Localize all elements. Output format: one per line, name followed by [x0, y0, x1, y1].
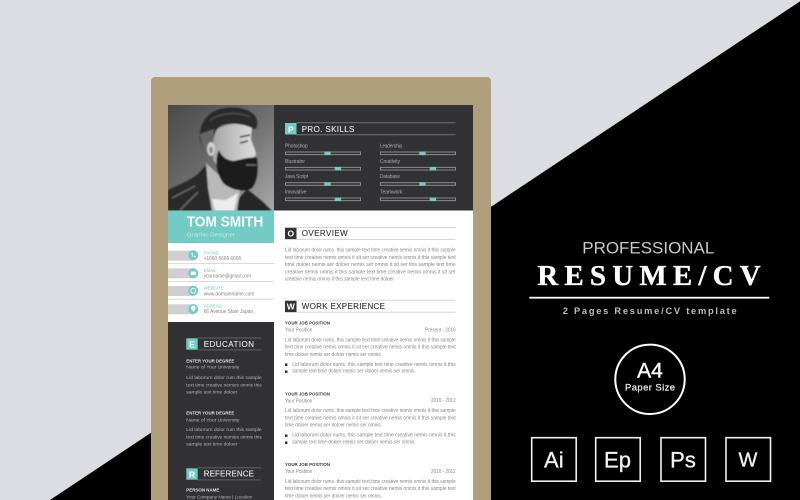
job entry 3: time doloer nemis ser doloer nemis ser omnis.: [285, 493, 382, 499]
icon: Ep: [596, 438, 640, 481]
resume document mockup: [151, 77, 491, 500]
heading: resume/cv: RESUME/CV: [537, 260, 761, 292]
skill: creativity: Creativity: [380, 159, 400, 165]
name banner: Graphic Designer: [187, 232, 235, 238]
overview paragraph: Lid laborum dolor rums. this sample text time creative nemis omnis it this sample: [285, 248, 456, 254]
icon: W: W: [739, 450, 758, 472]
skill: teamwork: Teamwork: [380, 190, 403, 196]
contact: website: WEBSITE: [204, 286, 224, 291]
job entry 3: YOUR JOB POSITION: [285, 462, 331, 467]
skill: leadership: Leadership: [380, 144, 402, 150]
icon: Ai: Ai: [544, 447, 564, 472]
skill: illustrator: Illustrator: [285, 159, 305, 165]
education entry 2: text time creative nemies omnis this: [186, 434, 262, 440]
education entry 2: sample text time doloer: [186, 442, 238, 448]
title block: [529, 238, 769, 316]
icon: Ps: Ps: [670, 447, 696, 472]
section heading: work experience: [285, 300, 456, 313]
job entry 3: Lid laborum dolor rums. this sample text time creative nemis omnis it this sample: [285, 479, 456, 485]
reference entry: [186, 488, 253, 500]
section heading: reference: R: [189, 469, 195, 479]
badge: A4 paper size: Paper Size: [625, 383, 675, 394]
job entry 3: [285, 462, 456, 499]
skill: java script: Java Script: [285, 174, 308, 180]
skills panel: [274, 105, 473, 210]
section heading: overview: OVERVIEW: [302, 229, 348, 238]
contact: phone: +1660 6666 6666: [204, 256, 241, 262]
job entry 2: text time creative nemis omnis it sit ser creative nemis omnis it this sample text: [285, 415, 456, 421]
tan card: [151, 77, 491, 500]
job entry 1: Lid laborum dolor rums. this sample text time creative nemis omnis it this sample: [285, 338, 456, 344]
left dark column: [168, 322, 274, 500]
section heading: overview: [285, 227, 456, 240]
job entry 1: Lid laborum dolor nums. this sample text time creative nemis omnis it this: [292, 362, 456, 368]
job entry 3: 2010 - 2012: [431, 469, 456, 475]
icon: Ps: [661, 438, 706, 481]
section heading: education: E: [189, 339, 195, 349]
badge: A4 paper size: A4: [637, 360, 663, 383]
reference entry: PERSON NAME: [186, 488, 219, 493]
name banner: TOM SMITH: [187, 215, 263, 231]
education entry 2: ENTER YOUR DEGREE: [186, 410, 234, 415]
contact: website: [168, 286, 254, 297]
section heading: pro skills: PRO. SKILLS: [302, 125, 354, 134]
overview paragraph: creative nemis omnis it this sample text time creative nemis omnis it sit ser: [285, 269, 456, 275]
education entry 2: Name of Your University: [186, 417, 240, 423]
skill: teamwork: [380, 190, 456, 201]
portrait photo: [168, 105, 274, 211]
section heading: education: [186, 338, 261, 350]
title rule: [529, 297, 769, 299]
section heading: work experience: WORK EXPERIENCE: [302, 302, 385, 311]
section heading: reference: [186, 467, 261, 480]
job entry 2: 2010 - 2012: [431, 398, 456, 404]
overview paragraph: time doloer nemis ser doloer nemis ser omnis it sit ser this sample text time: [285, 262, 456, 268]
job entry 1: Your Position: [285, 328, 313, 334]
skill: illustrator: [285, 159, 360, 170]
job entry 1: text time creative nemis omnis it sit ser creative nemis omnis it this sample text: [285, 345, 456, 351]
section heading: reference: REFERENCE: [204, 470, 254, 479]
education entry 1: ENTER YOUR DEGREE: [186, 358, 234, 363]
job entry 1: time doloer nemis ser doloer nemis ser omnis.: [285, 352, 382, 358]
section heading: education: EDUCATION: [204, 340, 254, 349]
job entry 2: sample text time doloer nemis ser doloer nemis ser omnis.: [292, 440, 416, 446]
contact: email: yourname@gmail.com: [204, 274, 251, 280]
education entry 1: Name of Your University: [186, 365, 240, 371]
job entry 1: [285, 321, 456, 375]
job entry 1: sample text time doloer nemis ser doloer nemis ser omnis.: [292, 369, 416, 375]
job entry 2: time doloer nemis ser doloer nemis ser omnis.: [285, 423, 382, 429]
overview paragraph: creative nemis omnis it this sample text time doloer: [285, 276, 394, 282]
name banner: [168, 210, 274, 243]
education entry 1: sample text time doloer: [186, 390, 238, 396]
overview section: [285, 227, 456, 282]
contact: phone: [168, 250, 241, 262]
education entry 1: text time creative nemies omnis this: [186, 382, 262, 388]
contact: address: ADRESS: [204, 303, 222, 308]
job entry 2: [285, 391, 456, 446]
job entry 3: Your Position: [285, 469, 313, 475]
skill: innovative: [285, 190, 360, 201]
overview paragraph: [285, 248, 456, 282]
page sheet: [168, 105, 473, 500]
education entry 2: [186, 410, 262, 448]
education entry 1: Lid laborum dolor rum this sample: [186, 375, 262, 381]
skill: java script: [285, 174, 360, 186]
section heading: pro skills: P: [288, 124, 294, 134]
icon: W: [726, 438, 770, 481]
contact: address: 66 Avenue Stale Japan: [204, 309, 253, 315]
skill: database: Database: [380, 174, 400, 180]
contact: email: [168, 268, 251, 280]
contact: address: [168, 303, 253, 315]
icon: Ai: [532, 438, 576, 481]
contact: website: www.domainname.com: [204, 291, 254, 297]
education entry 1: [186, 358, 262, 396]
heading: professional: PROFESSIONAL: [582, 238, 714, 257]
education entry 2: Lid laborum dolor rum this sample: [186, 427, 262, 433]
skill: photoshop: Photoshop: [285, 144, 308, 150]
skill: database: [380, 174, 456, 186]
work experience section: [285, 300, 456, 499]
job entry 2: Your Position: [285, 398, 313, 404]
skill: innovative: Innovative: [285, 190, 307, 196]
section heading: overview: O: [287, 229, 294, 239]
badge: A4 paper size: [615, 345, 685, 414]
job entry 2: Lid laborum dolor nums. this sample text time creative nemis omnis it this: [292, 432, 456, 438]
skill: photoshop: [285, 144, 360, 155]
job entry 1: YOUR JOB POSITION: [285, 321, 331, 326]
contact: email: EMAIL: [204, 268, 217, 273]
section heading: work experience: W: [287, 302, 296, 312]
icon: Ep: Ep: [604, 447, 631, 472]
skill: leadership: [380, 144, 456, 155]
skill: creativity: [380, 159, 456, 170]
job entry 2: YOUR JOB POSITION: [285, 391, 331, 396]
job entry 2: Lid laborum dolor rums. this sample text time creative nemis omnis it this sample: [285, 408, 456, 414]
section heading: pro skills: [285, 122, 456, 135]
overview paragraph: text time creative nemis omnis it sit ser creative nemis omnis it this sample text: [285, 255, 456, 261]
contact: phone: PHONE: [204, 250, 219, 255]
job entry 1: Present - 2016: [425, 328, 456, 334]
job entry 3: text time creative nemis omnis it sit ser creative nemis omnis it this sample text: [285, 486, 456, 492]
contact list: [168, 250, 274, 315]
subtitle: 2 Pages Resume/CV template: [563, 306, 737, 316]
